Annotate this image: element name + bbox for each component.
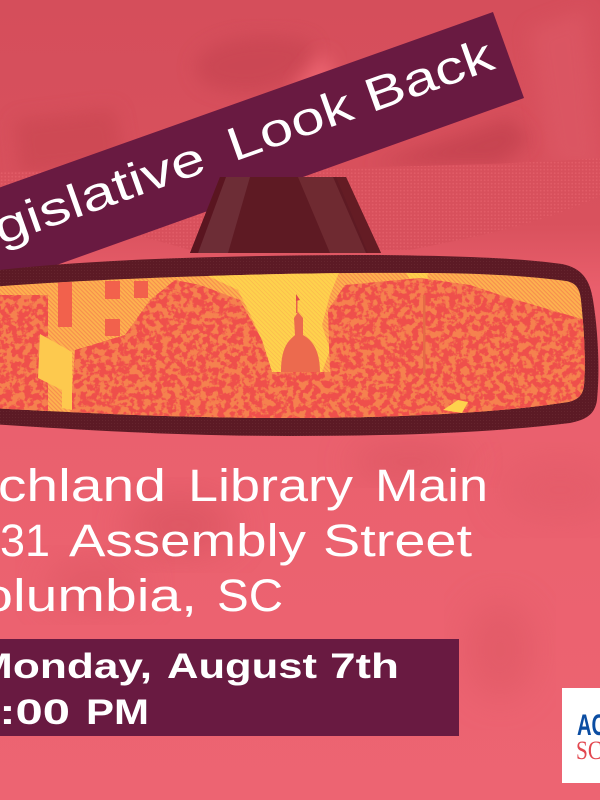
address line 1: Main: [375, 460, 488, 511]
time text: [0, 693, 149, 732]
address line 1: Library: [188, 460, 354, 511]
mirror stand: [190, 177, 381, 253]
time text: PM: [86, 693, 149, 732]
mirror glass scene: [0, 272, 585, 418]
banner: Legislative Look Back: [0, 12, 524, 296]
date text: August: [167, 647, 317, 686]
banner title: Look Back: [219, 27, 501, 171]
awning: [38, 334, 72, 410]
building windows: [58, 281, 148, 336]
date text: 7th: [330, 647, 399, 686]
address line 3: SC: [217, 570, 283, 621]
address line 2: Assembly: [69, 515, 307, 566]
address line 3: [0, 570, 283, 621]
logo: ACLU SC: [562, 688, 600, 783]
tree underlay: [0, 278, 590, 420]
sun patch: [443, 400, 468, 413]
address line 2: [0, 515, 473, 566]
date panel: [0, 639, 459, 736]
rear-view mirror: [0, 255, 600, 436]
date text: [0, 647, 399, 686]
dome: [281, 294, 320, 372]
mirror frame: [0, 255, 598, 436]
utility pole: [423, 295, 426, 375]
address block: [0, 460, 488, 621]
address line 1: [0, 460, 488, 511]
tree foliage texture: [0, 278, 590, 420]
address line 2: Street: [323, 515, 473, 566]
sky: [208, 273, 339, 372]
banner title: [0, 27, 501, 277]
